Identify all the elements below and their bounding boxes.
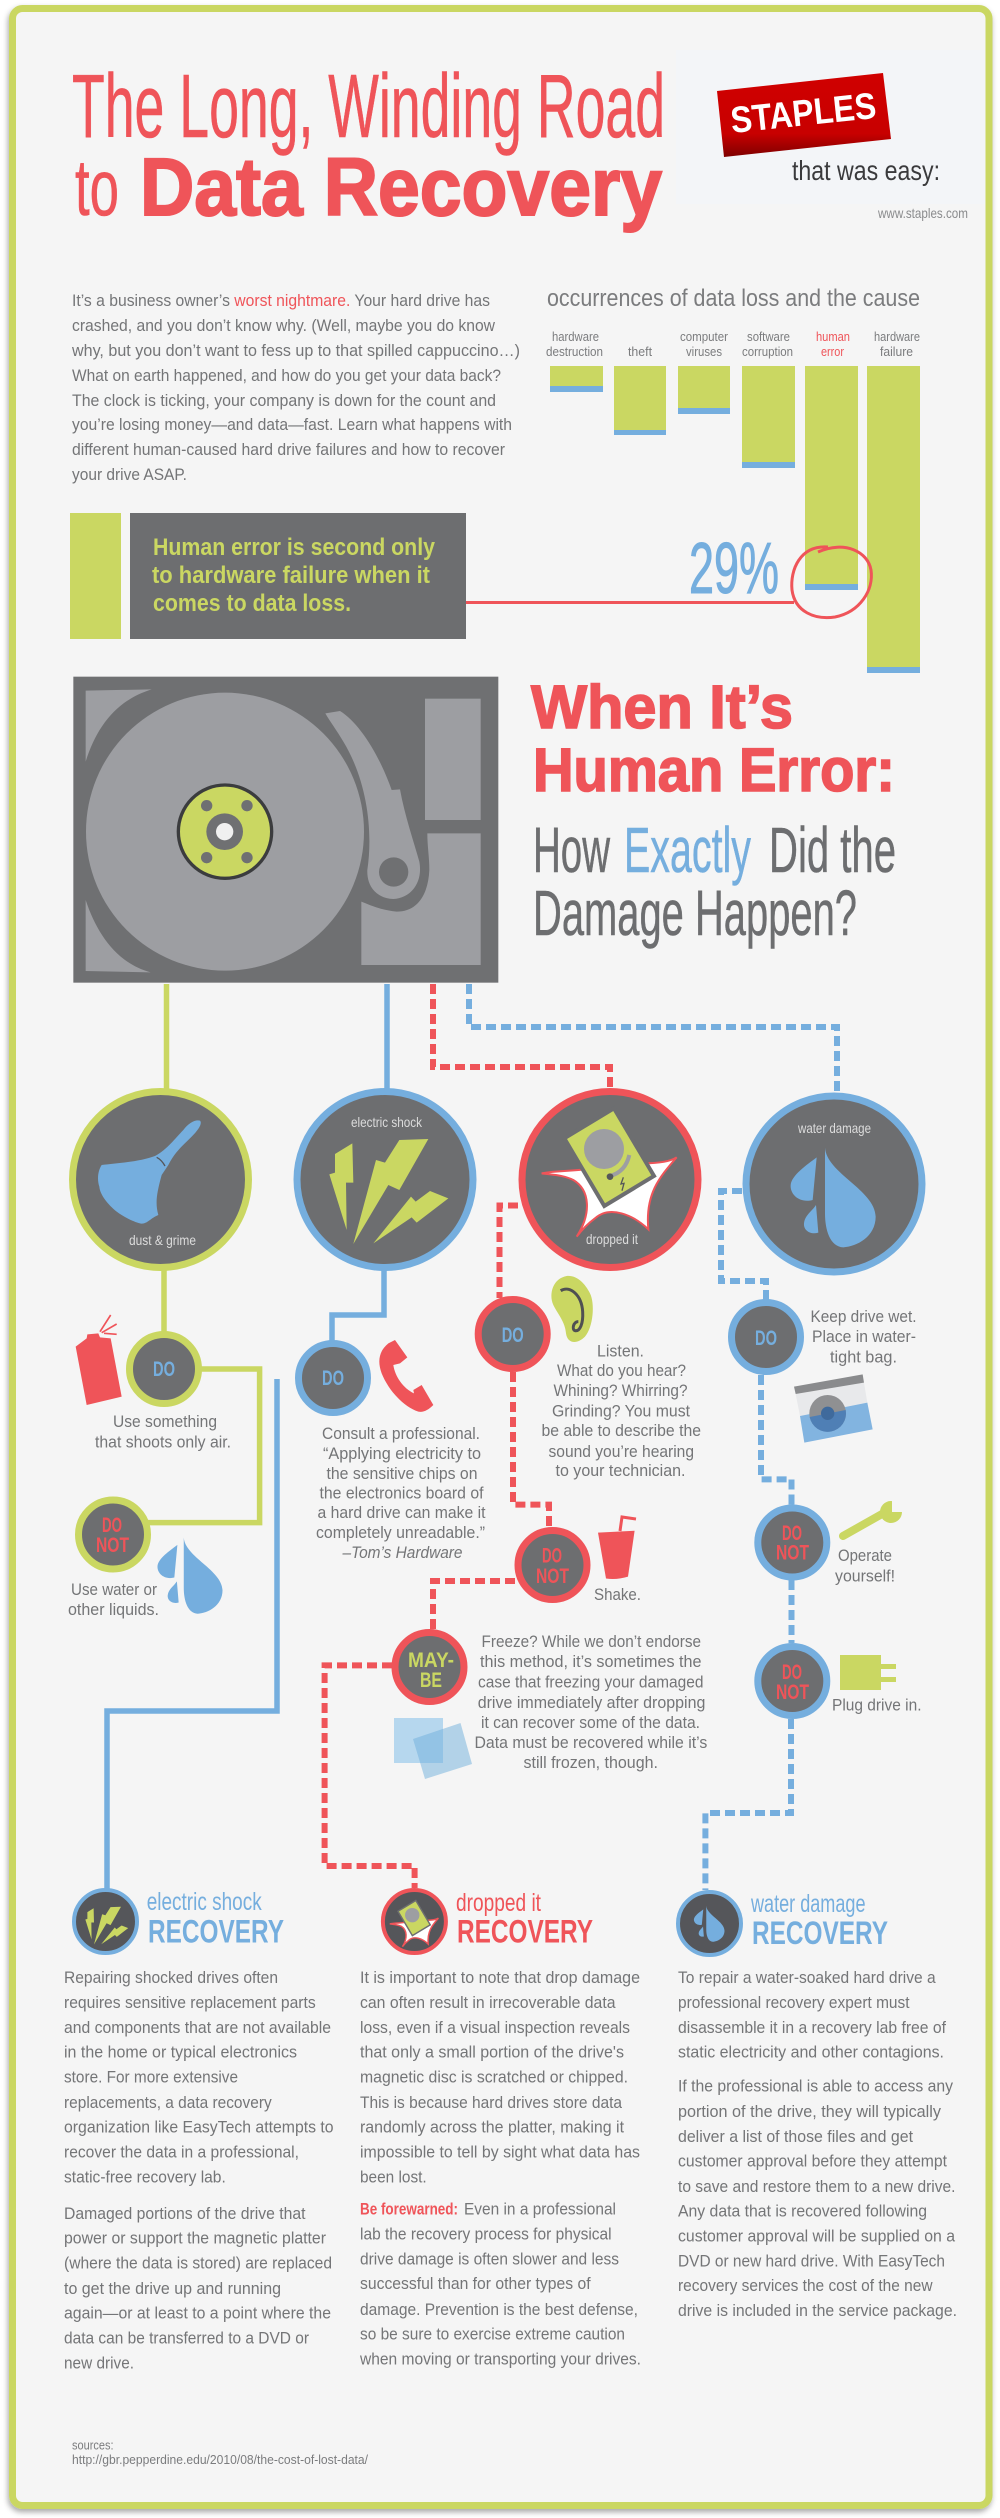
text: keep drive wet — [810, 1308, 916, 1366]
section heading: Did the — [769, 814, 896, 886]
icon: drive in bag — [794, 1374, 873, 1443]
recovery: dropped it: RECOVERY — [457, 1914, 593, 1950]
text: consult a professional: the electronics board of — [320, 1484, 484, 1502]
chart labels: human — [816, 330, 850, 344]
icon: cup — [598, 1517, 636, 1579]
text: dropped it recovery: lab the recovery process for physical — [360, 2226, 612, 2244]
icon: small drops — [694, 1906, 724, 1942]
sources — [72, 2438, 369, 2467]
text: dropped it recovery: magnetic disc is scratched or chipped. — [360, 2068, 628, 2086]
connector: dropped path — [325, 984, 610, 1888]
text: water damage recovery: customer approval before they attempt — [678, 2153, 947, 2171]
staples logo — [676, 50, 985, 221]
step: dust do not: DO — [102, 1514, 122, 1537]
text: water damage recovery: professional recovery expert must — [678, 1994, 910, 2012]
callout: human error — [70, 513, 466, 639]
text: electric shock recovery: (where the data is stored) are replaced — [64, 2254, 332, 2272]
step: dropped do not: DO — [542, 1544, 562, 1568]
chart labels: hardware — [552, 330, 599, 344]
step: water do not operate: NOT — [776, 1542, 809, 1564]
recovery: water damage: RECOVERY — [752, 1915, 888, 1951]
icon: water drops — [791, 1148, 876, 1247]
chart: occurrences of data loss — [546, 285, 920, 673]
text: use air: that shoots only air. — [95, 1434, 231, 1452]
icon: wrench — [843, 1499, 908, 1536]
step: water do — [732, 1302, 800, 1372]
icon: small bolts — [85, 1907, 128, 1945]
text: consult a professional: Consult a professional. — [322, 1425, 480, 1443]
intro text: The clock is ticking, your company is down for the count and — [72, 391, 496, 410]
text: water damage recovery: recovery services the cost of the new — [678, 2277, 933, 2295]
text: water damage recovery: Any data that is recovered following — [678, 2203, 927, 2221]
text: electric shock recovery: Repairing shocked drives often — [64, 1969, 278, 1987]
text: electric shock recovery: again—or at least to a point where the — [64, 2305, 331, 2323]
chart labels: error — [821, 345, 844, 359]
text: listen: to your technician. — [556, 1462, 686, 1480]
text: dropped it recovery: loss, even if a visual inspection reveals — [360, 2019, 630, 2037]
step: water do not plug: DO — [782, 1661, 802, 1684]
text: consult a professional: “Applying electricity to — [323, 1445, 481, 1463]
section heading: When It’s — [531, 673, 793, 741]
panel: water damage — [746, 1096, 922, 1272]
staples logo: STAPLES — [729, 85, 878, 141]
intro text: What on earth happened, and how do you get your data back? — [72, 366, 501, 385]
step: dropped maybe: MAY- — [408, 1649, 454, 1672]
text: electric shock recovery: to get the drive up and running — [64, 2280, 281, 2298]
text: freeze: this method, it’s sometimes the — [480, 1653, 702, 1671]
connector: water path — [469, 984, 837, 1890]
intro text: different human-caused hard drive failures and how to recover — [72, 440, 505, 459]
text: listen: Whining? Whirring? — [554, 1382, 688, 1400]
step: water do not operate — [758, 1508, 827, 1577]
step: dropped maybe — [395, 1632, 464, 1702]
text: listen: Grinding? You must — [552, 1402, 690, 1420]
text: electric shock recovery: recover the data in a professional, — [64, 2144, 299, 2162]
chart labels: corruption — [742, 345, 793, 359]
text: listen: Listen. — [597, 1342, 644, 1360]
sources: sources: — [72, 2438, 114, 2452]
callout: human error: to hardware failure when it — [152, 562, 430, 589]
text: consult a professional: –Tom’s Hardware — [342, 1544, 462, 1562]
text: water damage recovery: deliver a list of those files and get — [678, 2128, 913, 2146]
section heading: How — [533, 814, 610, 886]
callout: human error: Human error is second only — [153, 534, 436, 561]
text: dropped it recovery: can often result in irrecoverable data — [360, 1994, 616, 2012]
text: electric shock recovery: organization like EasyTech attempts to — [64, 2119, 334, 2137]
step: dropped do — [478, 1300, 547, 1368]
text: electric shock recovery: in the home or typical electronics — [64, 2044, 297, 2062]
text: use water — [68, 1581, 159, 1619]
text: keep drive wet: Place in water- — [812, 1328, 916, 1346]
recovery: electric shock: electric shock — [147, 1888, 262, 1916]
text: keep drive wet: tight bag. — [830, 1348, 897, 1366]
text: consult a professional: completely unreadable.” — [316, 1524, 485, 1542]
text: freeze: still frozen, though. — [524, 1754, 658, 1772]
text: water damage recovery: to save and restore them to a new drive. — [678, 2178, 956, 2196]
text: use water: Use water or — [71, 1581, 157, 1599]
text: electric shock recovery: static-free recovery lab. — [64, 2169, 226, 2187]
step: dust do: DO — [153, 1358, 175, 1381]
text: dropped it recovery: damage. Prevention is the best defense, — [360, 2301, 638, 2319]
intro text — [71, 291, 520, 484]
text: keep drive wet: Keep drive wet. — [810, 1308, 916, 1326]
text: freeze: Data must be recovered while it’s — [474, 1734, 707, 1752]
icon: phone — [379, 1340, 433, 1412]
text: electric shock recovery — [64, 1969, 334, 2373]
text: use air — [95, 1413, 231, 1452]
title: Data Recovery — [140, 142, 662, 233]
intro text: It’s a business owner’s worst nightmare. Your hard drive has — [72, 291, 490, 310]
step: dropped do not — [518, 1530, 587, 1600]
text: electric shock recovery: data can be transferred to a DVD or — [64, 2329, 309, 2347]
panel: dust and grime — [72, 1092, 248, 1268]
text: dropped it recovery: Be forewarned: — [360, 2201, 458, 2219]
panel: dust and grime: dust & grime — [129, 1232, 196, 1248]
step: dropped maybe: BE — [420, 1669, 442, 1692]
text: water damage recovery: DVD or new hard drive. With EasyTech — [678, 2253, 945, 2271]
icon: feather duster — [98, 1120, 201, 1224]
step: electric do — [298, 1344, 368, 1412]
text: listen: What do you hear? — [557, 1362, 686, 1380]
callout connector and 29 percent: 29% — [689, 529, 779, 609]
text: dropped it recovery — [359, 1969, 641, 2368]
text: use air: Use something — [113, 1413, 217, 1431]
icon: small dropped drive — [390, 1900, 438, 1947]
text: dropped it recovery: drive damage is often slower and less — [360, 2250, 619, 2268]
step: water do not plug — [758, 1646, 827, 1716]
recovery: electric shock: RECOVERY — [148, 1914, 284, 1950]
step: dust do not: NOT — [96, 1534, 129, 1557]
recovery: dropped it: dropped it — [456, 1889, 541, 1917]
text: listen: sound you’re hearing — [548, 1443, 694, 1461]
callout: human error: comes to data loss. — [153, 590, 351, 617]
text: dropped it recovery: impossible to tell by sight what data has — [360, 2144, 640, 2162]
text: freeze: case that freezing your damaged — [478, 1674, 704, 1692]
text: dropped it recovery: Even in a professional — [464, 2201, 616, 2219]
chart labels: computer — [680, 330, 728, 344]
text: dropped it recovery: It is important to note that drop damage — [360, 1969, 640, 1987]
text: dropped it recovery: randomly across the platter, making it — [360, 2119, 624, 2137]
text: water damage recovery — [678, 1969, 957, 2320]
text: water damage recovery: disassemble it in a recovery lab free of — [678, 2019, 946, 2037]
text: consult a professional: the sensitive chips on — [326, 1465, 478, 1483]
chart title: occurrences of data loss and the cause — [547, 285, 920, 312]
text: dropped it recovery: so be sure to exercise extreme caution — [360, 2326, 625, 2344]
hard drive illustration — [73, 677, 498, 983]
text: water damage recovery: customer approval will be supplied on a — [678, 2227, 956, 2245]
text: freeze — [474, 1633, 707, 1772]
text: electric shock recovery: and components that are not available — [64, 2019, 331, 2037]
text: operate yourself: Operate — [838, 1547, 892, 1565]
panel: dropped it — [522, 1092, 698, 1268]
text: electric shock recovery: requires sensitive replacement parts — [64, 1994, 316, 2012]
icon: spray can — [76, 1315, 122, 1405]
panel: dropped it: dropped it — [586, 1231, 638, 1247]
step: water do not operate: DO — [782, 1522, 802, 1545]
text: dropped it recovery: This is because hard drives store data — [360, 2094, 623, 2112]
sources: http://gbr.pepperdine.edu/2010/08/the-cost-of-lost-data/ — [72, 2453, 369, 2467]
recovery: water damage — [678, 1890, 888, 1955]
recovery: water damage: water damage — [750, 1890, 866, 1918]
text: operate yourself — [835, 1547, 895, 1586]
intro text: crashed, and you don’t know why. (Well, maybe you do know — [72, 316, 496, 335]
step: water do: DO — [755, 1327, 777, 1350]
chart labels: software — [747, 330, 790, 344]
text: water damage recovery: drive is included in the service package. — [678, 2302, 957, 2320]
text: use water: other liquids. — [68, 1601, 159, 1619]
text: listen — [542, 1342, 701, 1480]
chart labels: viruses — [686, 345, 722, 359]
text: consult a professional: a hard drive can make it — [318, 1504, 486, 1522]
text: electric shock recovery: store. For more extensive — [64, 2068, 238, 2086]
callout connector and 29 percent — [466, 529, 871, 618]
text: electric shock recovery: Damaged portions of the drive that — [64, 2205, 306, 2223]
step: dropped do not: NOT — [536, 1565, 569, 1588]
icon: dropped drive — [542, 1108, 677, 1237]
text: listen: be able to describe the — [542, 1422, 701, 1440]
text: water damage recovery: static electricity and other contagions. — [678, 2044, 944, 2062]
text: freeze: drive immediately after dropping — [478, 1694, 705, 1712]
text: water damage recovery: To repair a water-soaked hard drive a — [678, 1969, 936, 1987]
recovery: dropped it — [383, 1889, 593, 1953]
staples logo: www.staples.com — [877, 205, 968, 221]
text: dropped it recovery: been lost. — [360, 2169, 427, 2187]
chart labels: theft — [628, 345, 653, 359]
chart labels: failure — [880, 345, 913, 359]
chart labels: destruction — [546, 345, 603, 359]
intro text: your drive ASAP. — [72, 465, 187, 484]
section heading: Exactly — [624, 814, 751, 886]
text: dropped it recovery: successful than for other types of — [360, 2275, 591, 2293]
step: electric do: DO — [322, 1367, 344, 1390]
panel: electric shock — [297, 1092, 473, 1268]
icon: ear — [551, 1276, 593, 1342]
step: dust do — [130, 1334, 198, 1404]
chart labels — [546, 330, 920, 359]
chart labels: hardware — [874, 330, 920, 344]
icon: plug — [840, 1655, 896, 1690]
icon: ice cubes — [394, 1718, 472, 1779]
icon: liquid drops — [157, 1538, 223, 1614]
step: dust do not — [78, 1500, 148, 1569]
panel: water damage: water damage — [797, 1120, 871, 1136]
step: water do not plug: NOT — [776, 1681, 809, 1704]
title: to — [75, 143, 119, 232]
text: electric shock recovery: replacements, a data recovery — [64, 2094, 272, 2112]
step: dropped do: DO — [502, 1324, 524, 1347]
text: dropped it recovery: that only a small portion of the drive's — [360, 2044, 624, 2062]
title — [72, 57, 665, 233]
icon: lightning bolts — [329, 1139, 448, 1244]
connector: electric shock path — [107, 984, 387, 1890]
intro text: you’re losing money—and data—fast. Learn what happens with — [72, 415, 512, 434]
connector: dust path — [148, 984, 260, 1523]
text: dropped it recovery: when moving or transporting your drives. — [359, 2350, 641, 2368]
text: shake: Shake. — [594, 1586, 641, 1604]
text: operate yourself: yourself! — [835, 1568, 895, 1586]
intro text: why, but you don’t want to fess up to that spilled cappuccino…) — [71, 341, 520, 360]
text: freeze: Freeze? While we don’t endorse — [482, 1633, 701, 1651]
text: plug drive in: Plug drive in. — [832, 1696, 922, 1714]
text: water damage recovery: portion of the drive, they will typically — [678, 2103, 942, 2121]
section heading — [531, 673, 896, 949]
staples logo: that was easy: — [792, 155, 940, 186]
text: electric shock recovery: power or support the magnetic platter — [64, 2230, 326, 2248]
text: freeze: it can recover some of the data. — [481, 1714, 700, 1732]
recovery: electric shock — [74, 1888, 284, 1953]
text: consult a professional — [316, 1425, 486, 1562]
text: electric shock recovery: new drive. — [64, 2355, 134, 2373]
text: water damage recovery: If the professional is able to access any — [678, 2078, 954, 2096]
panel: electric shock: electric shock — [351, 1114, 423, 1130]
bars — [550, 366, 920, 673]
section heading: Human Error: — [533, 736, 895, 804]
